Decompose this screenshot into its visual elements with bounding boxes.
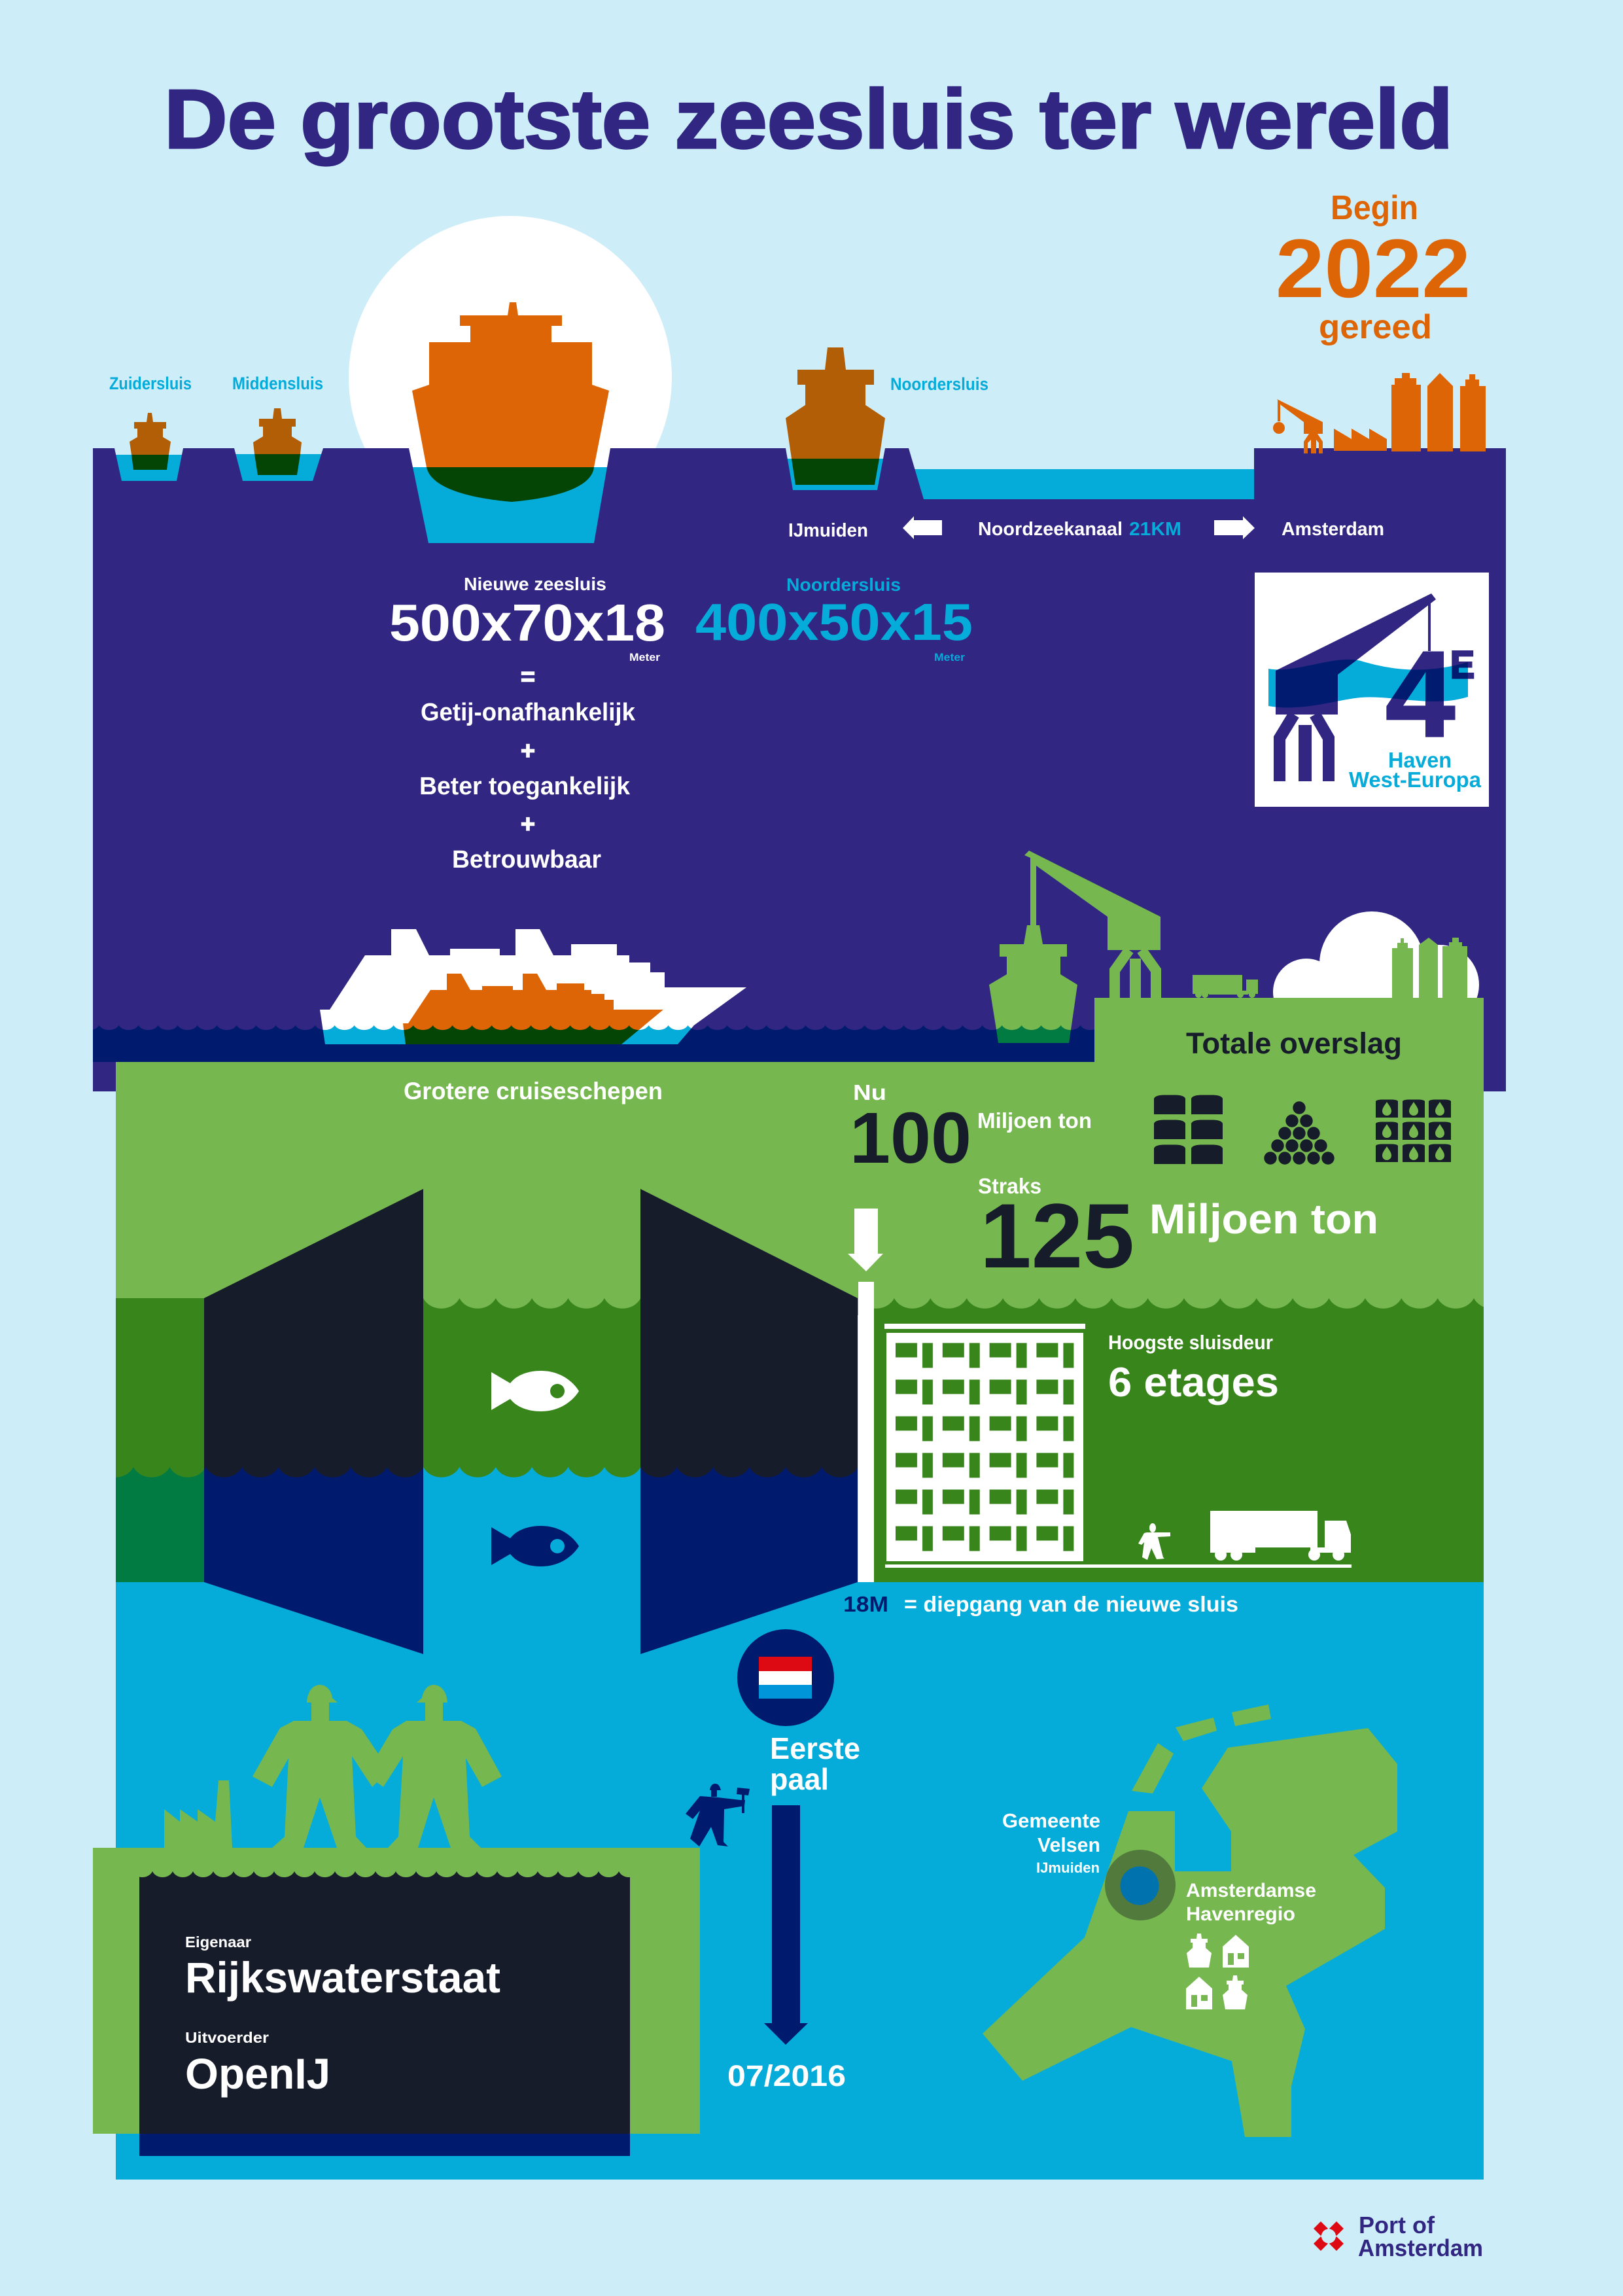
map of the Netherlands xyxy=(983,1704,1397,2137)
icons: ships and houses xyxy=(1186,1934,1249,2009)
IJmuiden location marker xyxy=(1105,1850,1176,1920)
canal route: IJmuiden, Noordzeekanaal 21KM, Amsterdam: IJmuiden xyxy=(788,520,868,541)
icon: pyramid of coal balls xyxy=(1264,1101,1335,1165)
stat: soon 125 million ton: Straks xyxy=(978,1174,1041,1198)
text: Eerste paal: paal xyxy=(770,1762,829,1796)
panel: 4th port of Western Europe: Haven xyxy=(1388,748,1452,772)
icon: two workers holding hands xyxy=(253,1685,502,1848)
title: De grootste zeesluis ter wereld xyxy=(164,73,1453,166)
stat: now 100 million ton: Miljoen ton xyxy=(977,1108,1092,1133)
islands xyxy=(1132,1704,1271,1793)
completion date: begin 2022 gereed: 2022 xyxy=(1276,222,1471,315)
text: highest lock door 6 floors: 6 etages xyxy=(1108,1360,1279,1405)
lock labels: Noordersluis xyxy=(890,374,988,394)
icon: oil containers xyxy=(1376,1099,1451,1162)
completion date: begin 2022 gereed: gereed xyxy=(1319,308,1432,346)
text: 18M draught: 18M xyxy=(843,1592,888,1616)
new sea lock dimensions and benefits: + xyxy=(521,737,535,765)
panel: green block with owner information: Uitvoerder xyxy=(185,2029,269,2046)
icon: green silos xyxy=(1392,938,1467,998)
text: 18M draught: = diepgang van de nieuwe sluis xyxy=(904,1592,1238,1616)
icon: apartment building xyxy=(884,1324,1352,1568)
label: Gemeente Velsen IJmuiden: Velsen xyxy=(1038,1833,1100,1856)
new sea lock dimensions and benefits: Beter toegankelijk xyxy=(419,773,631,800)
canal route: IJmuiden, Noordzeekanaal 21KM, Amsterdam: Noordzeekanaal xyxy=(978,519,1123,540)
icon: ship in Middensluis xyxy=(253,408,302,475)
new sea lock dimensions and benefits: Meter xyxy=(629,651,660,663)
completion date: begin 2022 gereed: Begin xyxy=(1331,189,1418,227)
lock labels: Middensluis xyxy=(232,374,323,393)
logo: Port of Amsterdam xyxy=(1314,2212,1483,2261)
lock labels: Zuidersluis xyxy=(109,374,192,393)
lock door: right xyxy=(640,1189,858,1654)
icon: ship in Zuidersluis xyxy=(130,413,171,470)
canal route: IJmuiden, Noordzeekanaal 21KM, Amsterdam: 21KM xyxy=(1129,519,1181,540)
mainland shape xyxy=(983,1728,1397,2137)
icon: depth pole xyxy=(858,1282,874,1582)
new sea lock dimensions and benefits: = xyxy=(521,663,535,691)
panel: green block with owner information xyxy=(93,1848,700,2156)
label: Amsterdamse Havenregio xyxy=(1186,1880,1316,1925)
stat: soon 125 million ton xyxy=(978,1174,1378,1287)
stat: now 100 million ton: 100 xyxy=(850,1098,971,1178)
new sea lock dimensions and benefits: Betrouwbaar xyxy=(452,846,601,874)
icon: navy fish xyxy=(491,1526,579,1566)
arrow: white down arrow xyxy=(848,1209,883,1271)
lock door: left xyxy=(204,1189,423,1654)
panel: purple land cross-section with locks xyxy=(93,448,1506,1091)
heading: Totale overslag: Totale overslag xyxy=(1186,1027,1402,1060)
icon: person xyxy=(1138,1523,1170,1560)
new sea lock dimensions and benefits: + xyxy=(521,811,535,838)
panel: green block with owner information: Rijkswaterstaat xyxy=(185,1953,500,2002)
icon: large ship in new sea lock xyxy=(412,302,609,502)
stat: soon 125 million ton: Miljoen ton xyxy=(1149,1195,1378,1243)
rank numeral 4E: E xyxy=(1450,644,1475,686)
icon: orange port skyline xyxy=(1273,373,1486,453)
panel: 4th port of Western Europe xyxy=(1255,573,1489,807)
label: Gemeente Velsen IJmuiden: Gemeente xyxy=(1002,1809,1100,1832)
icon: white fish xyxy=(491,1371,579,1411)
lock labels xyxy=(109,374,988,394)
icon: truck xyxy=(1210,1511,1351,1561)
new sea lock dimensions and benefits: Getij-onafhankelijk xyxy=(421,699,636,726)
Noordersluis dimensions xyxy=(695,574,973,663)
text: Eerste paal: Eerste xyxy=(770,1731,860,1765)
canal route: IJmuiden, Noordzeekanaal 21KM, Amsterdam: Amsterdam xyxy=(1282,519,1384,540)
new sea lock dimensions and benefits: 500x70x18 xyxy=(389,593,665,652)
stat: now 100 million ton xyxy=(850,1080,1092,1178)
icon: large white cruise ship xyxy=(314,929,746,1044)
panel: 4th port of Western Europe: West-Europa xyxy=(1349,768,1482,792)
icon: white cloud xyxy=(1273,911,1479,998)
label: Amsterdamse Havenregio: Havenregio xyxy=(1186,1903,1295,1925)
icon: ship in Noordersluis xyxy=(786,347,885,485)
lock water fills xyxy=(111,454,1256,546)
sea with wave edge xyxy=(93,1025,1094,1062)
Noordersluis dimensions: Meter xyxy=(934,651,965,663)
panel: green block with owner information: Eigenaar xyxy=(185,1934,251,1951)
icon: green ship at quay xyxy=(989,925,1077,1043)
icon: worker with hammer xyxy=(686,1784,750,1846)
text: highest lock door 6 floors xyxy=(1108,1331,1279,1405)
logo: Port of Amsterdam: Port of xyxy=(1359,2212,1435,2238)
label: Gemeente Velsen IJmuiden xyxy=(1002,1809,1100,1876)
text: Eerste paal xyxy=(770,1731,860,1796)
new sea lock dimensions and benefits: Nieuwe zeesluis xyxy=(464,574,606,594)
icon: green truck xyxy=(1193,975,1258,998)
new sea lock dimensions and benefits xyxy=(389,574,665,874)
stat: soon 125 million ton: 125 xyxy=(980,1184,1134,1287)
arrow: timeline down arrow xyxy=(764,1805,808,2045)
panel: green total transhipment land block xyxy=(116,998,1484,1315)
panel: green block with owner information: OpenIJ xyxy=(185,2049,330,2098)
label: Amsterdamse Havenregio: Amsterdamse xyxy=(1186,1880,1316,1901)
completion date: begin 2022 gereed xyxy=(1276,189,1471,346)
text: 07/2016: 07/2016 xyxy=(727,2059,846,2093)
label: Gemeente Velsen IJmuiden: IJmuiden xyxy=(1036,1860,1100,1876)
sun behind the new sea lock xyxy=(349,216,672,539)
text: highest lock door 6 floors: Hoogste sluisdeur xyxy=(1108,1331,1273,1354)
icon: barrels xyxy=(1154,1095,1223,1164)
icon: wave band xyxy=(1268,660,1468,707)
stat: now 100 million ton: Nu xyxy=(853,1080,886,1104)
Noordersluis dimensions: Noordersluis xyxy=(786,574,901,595)
Noordersluis dimensions: 400x50x15 xyxy=(695,593,973,651)
icon: green quay crane xyxy=(1024,851,1161,998)
panel: lock chamber cross-section xyxy=(116,1189,1484,2180)
icon: crane xyxy=(1276,593,1436,781)
rank numeral 4E: 4 xyxy=(1386,627,1455,762)
canal route: IJmuiden, Noordzeekanaal 21KM, Amsterdam xyxy=(788,516,1384,541)
icon: smaller orange cruise ship xyxy=(399,974,663,1044)
icon: green factory xyxy=(164,1780,232,1848)
icon: Dutch flag circle xyxy=(737,1629,834,1726)
logo: Port of Amsterdam: Amsterdam xyxy=(1358,2234,1483,2261)
heading: Grotere cruiseschepen: Grotere cruiseschepen xyxy=(404,1078,663,1104)
